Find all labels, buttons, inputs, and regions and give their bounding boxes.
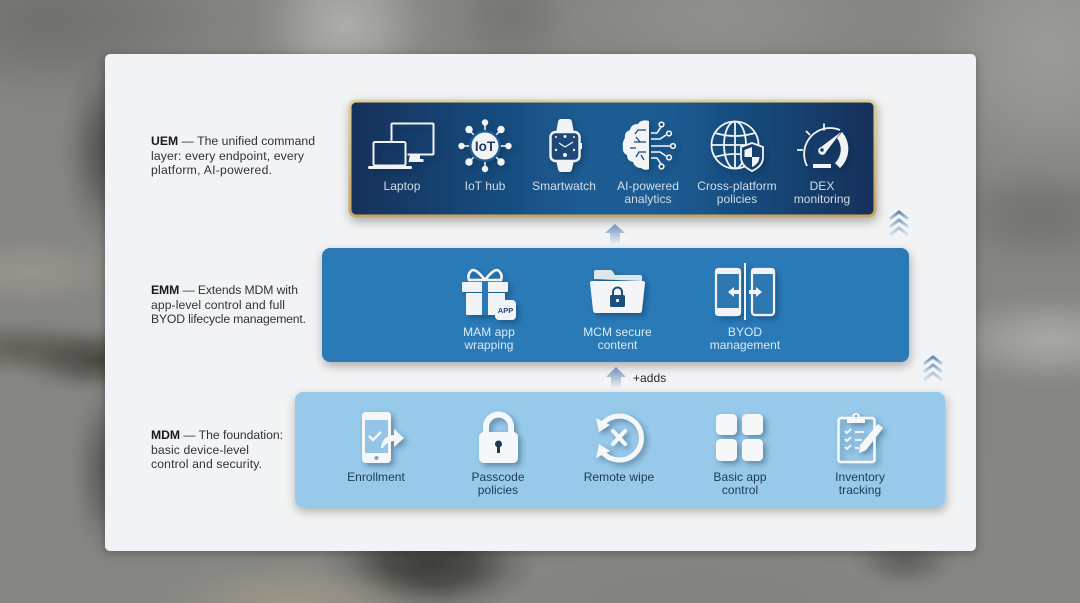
description: EMM: app-level control and full: [151, 298, 285, 312]
label: Passcode: Passcode: [471, 470, 525, 484]
label: policies: policies: [478, 483, 518, 497]
label: wrapping: wrapping: [463, 338, 514, 352]
label: MCM secure: MCM secure: [583, 325, 652, 339]
icon: IoT hub: [458, 119, 512, 172]
icon: gift with app badge: [462, 270, 516, 320]
label: Remote wipe: Remote wipe: [584, 470, 655, 484]
description: UEM: layer: every endpoint, every: [151, 149, 305, 163]
description: MDM: MDM — The foundation:: [151, 428, 283, 442]
label: Laptop: Laptop: [383, 179, 421, 193]
label: Inventory: Inventory: [835, 470, 885, 484]
icon: BYOD phones: [715, 263, 775, 320]
label: management: management: [710, 338, 781, 352]
label: Cross-platform: Cross-platform: [697, 179, 777, 193]
description: MDM: [151, 428, 283, 471]
icon: clipboard checklist: [838, 413, 883, 462]
panel: UEM: [350, 101, 875, 216]
arrow: EMM to UEM: [605, 224, 625, 243]
white card: [105, 54, 976, 551]
label: policies: policies: [717, 192, 757, 206]
icon: DEX gauge: [797, 124, 848, 168]
description: EMM: BYOD lifecycle management.: [151, 312, 306, 326]
description: EMM: [151, 283, 306, 326]
icon: IoT hub: IoT: [475, 139, 496, 154]
chevrons: lower: [924, 357, 942, 380]
description: EMM: EMM — Extends MDM with: [151, 283, 298, 297]
icon: remote wipe: [596, 416, 641, 460]
label: IoT hub: IoT hub: [465, 179, 506, 193]
label: Enrollment: Enrollment: [347, 470, 406, 484]
label: content: content: [598, 338, 638, 352]
icon: padlock: [479, 414, 518, 463]
label: monitoring: monitoring: [794, 192, 850, 206]
arrow: MDM to EMM: [606, 367, 626, 387]
label: Basic app: Basic app: [713, 470, 767, 484]
label: +adds: +adds: [633, 371, 666, 385]
icon: AI brain: [623, 120, 675, 170]
label: tracking: tracking: [839, 483, 881, 497]
panel: MDM: [295, 392, 945, 507]
chevrons: upper: [890, 212, 908, 235]
icon: gift with app badge: APP: [498, 306, 513, 315]
label: MAM app: MAM app: [463, 325, 515, 339]
description: UEM: [151, 134, 315, 177]
description: MDM: basic device-level: [151, 443, 249, 457]
description: UEM: platform, AI-powered.: [151, 163, 272, 177]
panel: EMM: [322, 248, 909, 362]
icon: enrollment phone: [362, 412, 404, 463]
description: MDM: control and security.: [151, 457, 262, 471]
label: analytics: analytics: [624, 192, 672, 206]
icon: app grid: [716, 414, 763, 461]
label: DEX: DEX: [810, 179, 834, 193]
icon: smartwatch: [550, 119, 582, 172]
description: UEM: UEM — The unified command: [151, 134, 315, 148]
icon: secure folder: [590, 270, 645, 313]
label: control: control: [722, 483, 758, 497]
label: BYOD: BYOD: [728, 325, 762, 339]
label: Smartwatch: Smartwatch: [532, 179, 596, 193]
icon: laptop and monitor: [370, 124, 434, 168]
label: AI-powered: AI-powered: [617, 179, 679, 193]
icon: globe with shield: [712, 122, 763, 171]
